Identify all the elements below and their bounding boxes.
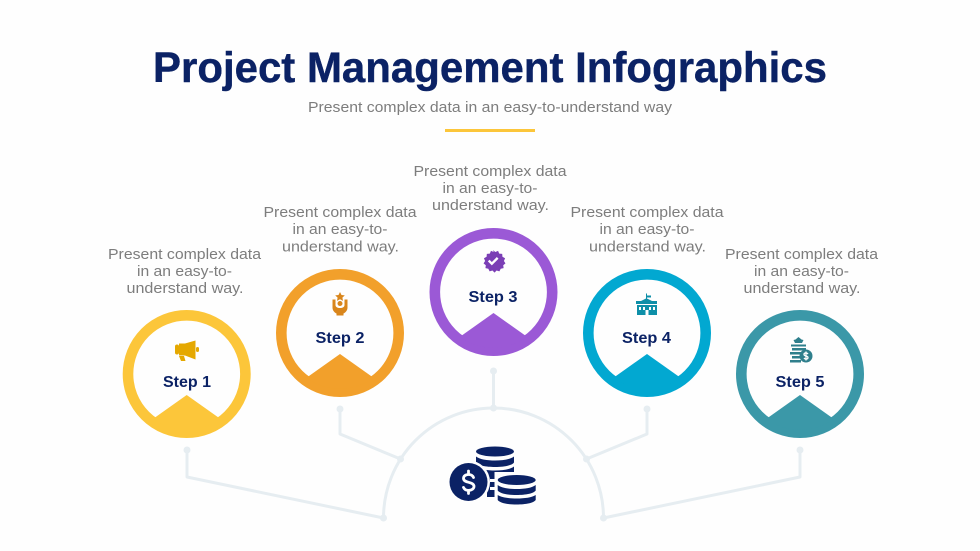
step 5 description: Present complex data [725,246,879,263]
step 1 description: in an easy-to- [137,263,232,280]
step 4 description [570,204,724,256]
icon: person with star [332,292,348,316]
step 4 description: understand way. [589,238,706,256]
step 5 ring [741,315,859,433]
step 3 group [414,163,567,351]
step 2 group [264,204,417,392]
step 1 ring [128,315,245,433]
icon: megaphone [175,340,199,361]
step 5 description [725,246,879,297]
step 3 ring [435,233,552,351]
step 4 description: Present complex data [570,204,724,221]
icon: coins and dollar [447,446,538,506]
step 4 label: Step 4 [622,330,671,347]
icon: coin stack [790,337,812,362]
step 1 description [108,246,262,297]
subtitle: Present complex data in an easy-to-understand way [308,99,673,116]
step 5 description: understand way. [744,280,860,297]
step 4 description: in an easy-to- [600,221,694,238]
step 2 description: Present complex data [264,204,417,221]
step 1 group [108,246,262,433]
step 2 description: in an easy-to- [292,221,388,238]
step 5 group [725,246,879,433]
step 5 label: Step 5 [776,374,825,391]
step 1 description: understand way. [126,280,244,297]
title underline [445,129,535,132]
step 2 ring [281,274,399,392]
step 2 description: understand way. [282,238,399,256]
step 5 description: in an easy-to- [754,263,849,280]
connector network [184,368,804,522]
step 4 ring [588,274,706,392]
step 2 description [264,204,417,256]
icon: verified badge [484,250,505,273]
step 3 description: Present complex data [414,163,567,180]
title: Project Management Infographics [153,44,827,92]
step 1 label: Step 1 [163,374,211,391]
step 1 description: Present complex data [108,246,262,263]
step 3 description: in an easy-to- [442,180,538,197]
step 4 group [570,204,724,392]
step 3 description [414,163,567,214]
step 3 description: understand way. [432,197,549,214]
step 3 label: Step 3 [468,289,518,306]
step 2 label: Step 2 [316,330,365,347]
icon: building [636,294,657,315]
